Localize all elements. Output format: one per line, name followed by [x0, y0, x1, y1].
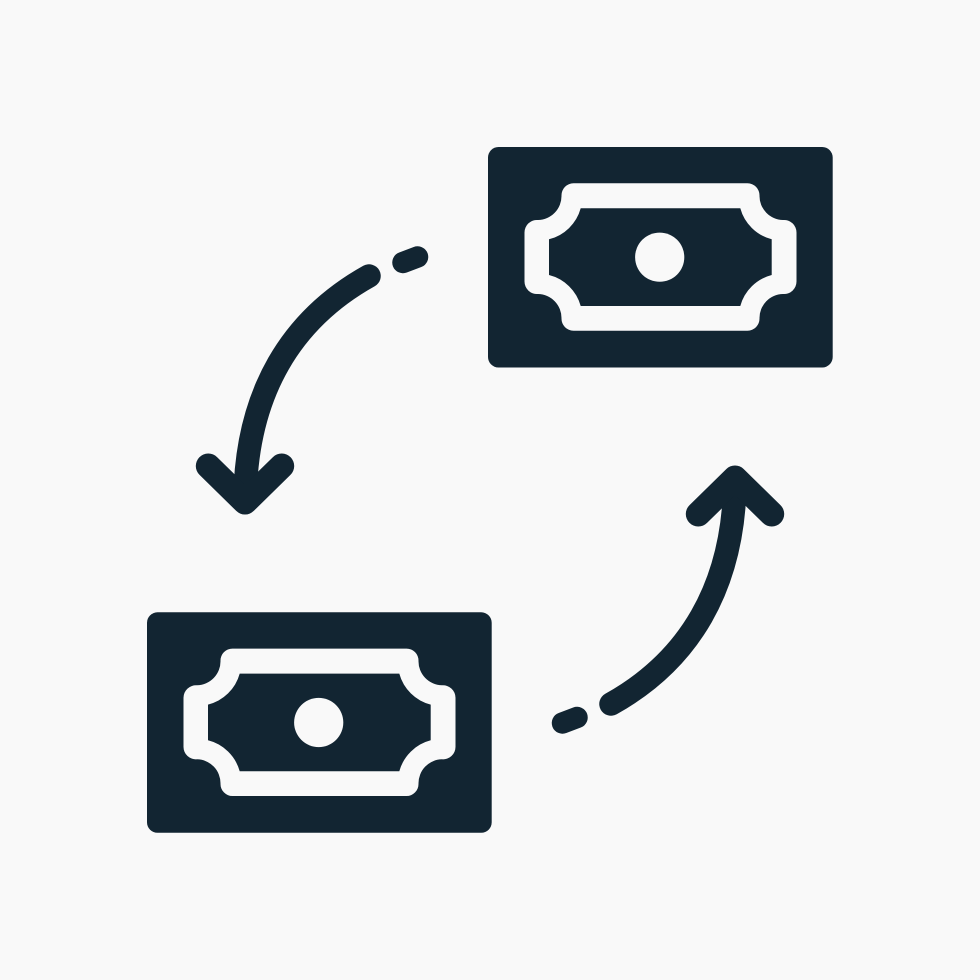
arrow: top left curved arrow pointing down — [208, 257, 418, 502]
icon: bottom left banknote — [147, 612, 492, 833]
icon: top right banknote — [488, 147, 833, 368]
arrow: bottom right curved arrow pointing up — [562, 478, 772, 723]
